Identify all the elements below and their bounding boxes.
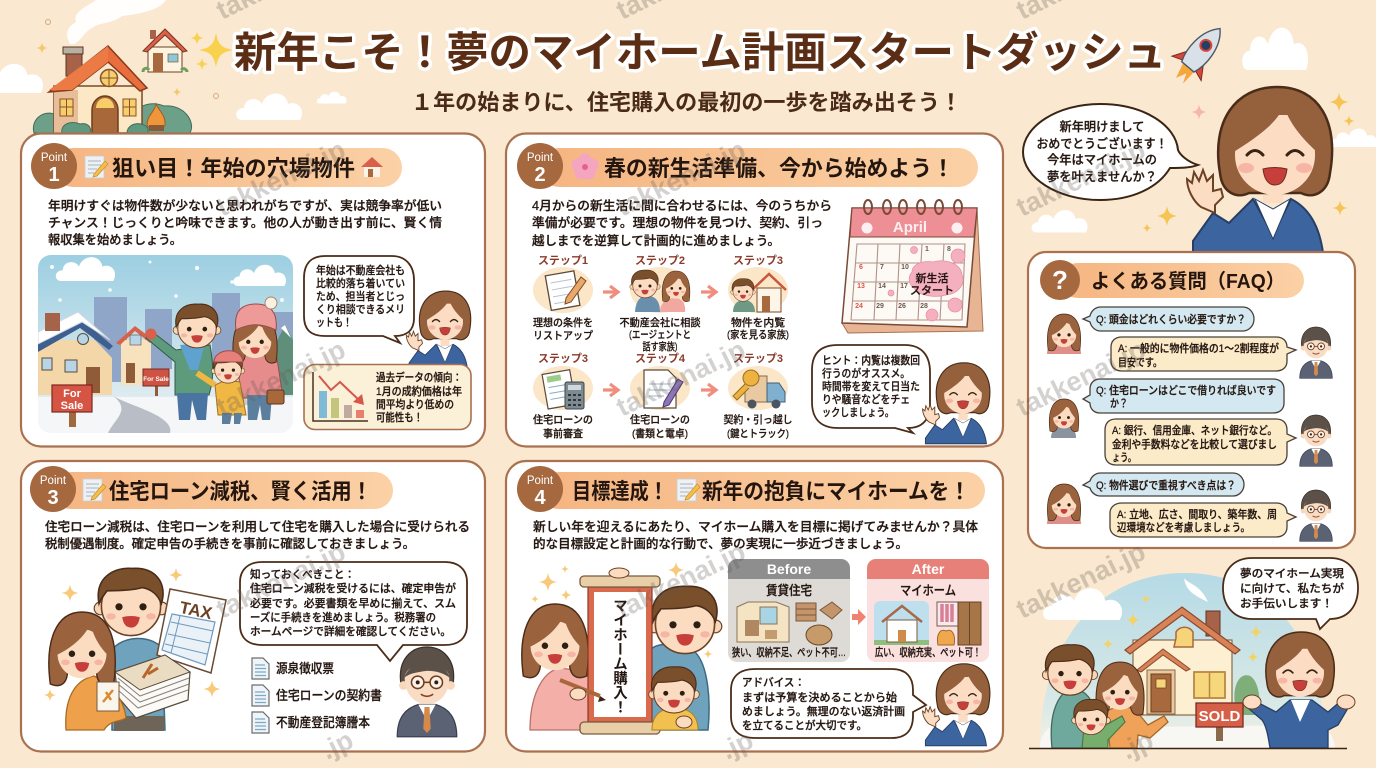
step 5: (書類と電卓) — [632, 427, 688, 440]
comparison: after — [867, 559, 989, 662]
step 4 — [533, 352, 593, 440]
For Sale sign — [69, 412, 76, 427]
callout: price trend: 過去データの傾向： — [376, 370, 462, 384]
text: point 3 body: 税制優遇制度。確定申告の手続きを事前に確認しておきましょう。 — [45, 536, 415, 551]
step 2: ステップ2 — [635, 254, 685, 267]
arrow — [603, 286, 618, 298]
illustration: couple with tax papers — [44, 568, 226, 731]
step 2: 話す家族) — [642, 340, 678, 353]
speech bubble: hint: 時間帯を変えて日当た — [822, 379, 920, 393]
panel frame — [506, 134, 1003, 446]
step 4: 事前審査 — [543, 427, 583, 440]
speech bubble: point 1: ため、担当者とじっ — [316, 289, 405, 303]
answer 2: ょう。 — [1112, 451, 1136, 464]
text: point 3 body — [45, 519, 470, 551]
speech bubble: hint: りや騒音などをチェ — [822, 392, 910, 406]
comparison: before: Before — [767, 561, 811, 577]
arrow — [701, 286, 716, 298]
illustration: April calendar: 14 — [878, 283, 886, 290]
step 5 — [630, 352, 690, 440]
answer 1: A: 一般的に物件価格の1～2割程度が — [1118, 341, 1279, 355]
heading: point 3 — [30, 466, 393, 512]
list: required documents: 不動産登記簿謄本 — [276, 715, 370, 730]
panel: FAQ — [1028, 252, 1355, 548]
watermark: takkenai.jp — [611, 334, 750, 422]
child — [215, 380, 246, 415]
speech bubble: point 1 — [304, 256, 414, 343]
watermark: takkenai.jp — [211, 134, 350, 222]
heading: FAQ: ? — [1052, 265, 1068, 295]
text: point 1 body — [48, 198, 442, 247]
illustration: house with smoke — [33, 0, 219, 133]
heading: FAQ — [1040, 260, 1304, 300]
watermark — [211, 0, 1158, 765]
character: advisor — [923, 664, 990, 746]
answer 2: 金利や手数料などを比較して選びまし — [1112, 437, 1277, 451]
heading: point 3: 3 — [47, 487, 59, 509]
arrow — [603, 384, 618, 396]
step 5: 住宅ローンの — [630, 413, 690, 426]
speech bubble: hint: ヒント：内覧は複数回 — [822, 353, 920, 367]
illustration: April calendar: 26 — [898, 303, 906, 310]
icon: sparkles — [190, 32, 233, 70]
step 1: 理想の条件を — [533, 316, 593, 329]
SOLD sign: SOLD — [1199, 708, 1240, 725]
heading: FAQ: よくある質問（FAQ） — [1091, 270, 1285, 293]
illustration: April calendar: 新生活 — [916, 271, 948, 285]
arrow: before to after — [852, 609, 866, 625]
heading: point 4: 新年の抱負にマイホームを！ — [702, 479, 970, 504]
list: required documents: 住宅ローンの契約書 — [276, 688, 382, 703]
speech bubble: hint: ックしましょう。 — [822, 406, 894, 419]
heading: point 4: 4 — [534, 487, 546, 509]
step 6: ステップ3 — [733, 352, 783, 365]
step 6: (鍵とトラック) — [727, 427, 789, 440]
heading: point 1: 1 — [48, 164, 60, 186]
woman in hat — [238, 355, 282, 398]
speech bubble: greeting: 新年明けまして — [1060, 119, 1144, 134]
speech bubble: need to know — [240, 562, 467, 661]
speech bubble: closing: に向けて、私たちが — [1240, 581, 1344, 595]
heading: point 3: Point — [40, 475, 67, 487]
step 6: 契約・引っ越し — [724, 413, 792, 426]
illustration: April calendar: 8 — [947, 246, 951, 253]
SOLD sign — [1196, 703, 1243, 741]
comparison: before: 狭い、収納不足、ペット不可… — [732, 645, 846, 659]
illustration: family with resolution scroll: マイホーム購入！ — [611, 598, 627, 714]
text: point 2 body — [532, 198, 832, 248]
avatar: advisor 1 — [1300, 327, 1332, 378]
watermark: .jp — [716, 725, 758, 765]
illustration: family with resolution scroll — [522, 562, 722, 734]
illustration: April calendar: 10 — [901, 264, 909, 271]
comparison: after: マイホーム — [900, 583, 956, 598]
panel frame — [506, 461, 1003, 752]
step 1: リストアップ — [533, 330, 593, 342]
illustration: April calendar: 17 — [900, 283, 908, 290]
character: advisor — [406, 291, 471, 369]
title: 新年こそ！夢のマイホーム計画スタートダッシュ — [234, 29, 1166, 76]
avatar: woman asking 1 — [1047, 314, 1081, 354]
man pointing — [146, 330, 213, 395]
text: point 4 body — [533, 519, 978, 551]
step 1 — [533, 254, 593, 342]
speech bubble: need to know: ーズに手続きを進めましょう。税務署の — [250, 610, 436, 624]
text: point 2 body: 4月からの新生活に間に合わせるには、今のうちから — [532, 198, 832, 213]
heading: point 4: Point — [527, 475, 554, 487]
text: point 1 body: 報収集を始めましょう。 — [48, 232, 182, 247]
watermark: takkenai.jp — [1011, 334, 1150, 422]
speech bubble: point 1: くり相談できるメリ — [316, 302, 405, 316]
heading: point 4: 目標達成！ — [572, 479, 668, 504]
character: tax advisor — [397, 647, 457, 737]
illustration: April calendar: 1 — [925, 246, 929, 253]
heading: point 1: Point — [41, 152, 68, 164]
family — [1042, 645, 1168, 748]
question 1: Q: 頭金はどれくらい必要ですか？ — [1096, 312, 1246, 326]
step 1: ステップ1 — [538, 254, 588, 267]
watermark: takkenai.jp — [1011, 134, 1150, 222]
steps flow — [533, 254, 792, 440]
speech bubble: point 1: ットも！ — [316, 316, 352, 329]
panel: point 2 — [506, 134, 1003, 446]
illustration: April calendar: April — [893, 219, 927, 236]
speech bubble: greeting: 夢を叶えませんか？ — [1047, 170, 1157, 184]
answer 2: A: 銀行、信用金庫、ネット銀行など。 — [1112, 423, 1277, 437]
step 2: 不動産会社に相談 — [620, 316, 701, 329]
illustration: family at new home with advisor — [1029, 573, 1355, 748]
speech bubble: advice: めましょう。無理のない返済計画 — [742, 704, 905, 718]
avatar: advisor 2 — [1300, 415, 1332, 466]
subtitle: １年の始まりに、住宅購入の最初の一歩を踏み出そう！ — [411, 90, 962, 115]
speech bubble: need to know: 住宅ローン減税を受けるには、確定申告が — [250, 581, 456, 595]
illustration: April calendar: スタート — [910, 284, 954, 297]
heading: point 4 — [517, 466, 985, 512]
heading: point 2: 春の新生活準備、今から始めよう！ — [604, 156, 954, 181]
panel: point 1 — [21, 134, 485, 446]
panel frame — [1028, 252, 1355, 548]
step 3 — [727, 254, 789, 341]
watermark: takkenai.jp — [1011, 536, 1150, 624]
text: point 1 body: 年明けすぐは物件数が少ないと思われがちですが、実は競争率が低い — [48, 198, 442, 213]
step 5: ステップ4 — [635, 352, 686, 365]
speech bubble: greeting: 今年はマイホームの — [1047, 152, 1157, 167]
step 6 — [724, 352, 792, 440]
speech bubble: need to know: 知っておくべきこと： — [250, 567, 355, 581]
step 4: 住宅ローンの — [533, 413, 593, 426]
answer 2 — [1105, 419, 1296, 465]
speech bubble: point 1: 年始は不動産会社も — [316, 263, 405, 277]
panel: greeting with advisor — [1023, 87, 1354, 253]
question 2 — [1083, 379, 1284, 413]
step 4: ステップ3 — [538, 352, 588, 365]
heading: point 3: 住宅ローン減税、賢く活用！ — [109, 479, 372, 504]
callout: price trend: 1月の成約価格は年 — [376, 384, 462, 398]
speech bubble: greeting — [1023, 104, 1198, 200]
background clouds — [0, 28, 1376, 232]
text: point 4 body: 新しい年を迎えるにあたり、マイホーム購入を目標に掲げてみませんか？具体 — [533, 519, 978, 534]
question 2: Q: 住宅ローンはどこで借りれば良いです — [1096, 383, 1276, 397]
watermark: .jp — [1116, 725, 1158, 765]
speech bubble: need to know: ホームページで詳細を確認してください。 — [250, 624, 451, 638]
comparison: after: After — [912, 561, 945, 577]
list: required documents: 源泉徴収票 — [276, 661, 334, 676]
watermark: .jp — [316, 725, 358, 765]
arrow — [701, 384, 716, 396]
advisor — [1243, 632, 1355, 748]
speech bubble: advice: まずは予算を決めることから始 — [742, 690, 897, 704]
comparison: before — [728, 559, 850, 662]
text: point 4 body: 的な目標設定と計画的な行動で、夢の実現に一歩近づきましょう。 — [533, 536, 908, 551]
callout: price trend — [304, 364, 471, 430]
heading: point 1: 狙い目！年始の穴場物件 — [112, 156, 355, 181]
icon: rocket — [1163, 16, 1235, 91]
illustration: April calendar: 24 — [855, 303, 863, 310]
panel frame — [21, 461, 485, 752]
speech bubble: advice — [731, 669, 926, 738]
illustration: April calendar: 7 — [880, 264, 884, 271]
heading: point 2: Point — [527, 152, 554, 164]
text: point 2 body: 準備が必要です。理想の物件を見つけ、契約、引っ — [532, 215, 823, 230]
step 2 — [620, 254, 701, 353]
comparison: after: 広い、収納充実、ペット可！ — [875, 645, 981, 659]
heading: point 2 — [517, 143, 978, 189]
answer 3: 辺環境などを考慮しましょう。 — [1117, 520, 1250, 534]
panel frame — [21, 134, 485, 446]
speech bubble: advice: を立てることが大切です。 — [742, 718, 867, 732]
watermark: takkenai.jp — [611, 536, 750, 624]
avatar: advisor 3 — [1300, 490, 1332, 541]
speech bubble: closing — [1223, 558, 1358, 629]
character: advisor — [923, 363, 990, 444]
illustration: family in snowy neighbourhood: Sale — [61, 400, 83, 412]
illustration: April calendar: 28 — [920, 303, 928, 310]
text: point 1 body: チャンス！じっくりと吟味できます。他の人が動き出す前に、賢く情 — [48, 215, 442, 230]
panel: point 3 — [21, 461, 485, 752]
text: point 3 body: 住宅ローン減税は、住宅ローンを利用して住宅を購入した場合に受けられる — [45, 519, 470, 534]
step 3: (家を見る家族) — [727, 328, 789, 341]
comparison: before: 賃貸住宅 — [766, 583, 812, 598]
speech bubble: hint: 行うのがオススメ。 — [822, 366, 910, 380]
step 3: ステップ3 — [733, 254, 783, 267]
icon: small house — [143, 29, 187, 72]
panel: point 4 — [506, 461, 1003, 752]
speech bubble: closing: お手伝いします！ — [1240, 596, 1333, 610]
text: point 2 body: 越しまでを逆算して計画的に進めましょう。 — [532, 233, 780, 248]
answer 1 — [1111, 337, 1296, 371]
speech bubble: closing: 夢のマイホーム実現 — [1240, 566, 1344, 580]
watermark: takkenai.jp — [211, 334, 350, 422]
step 2: (エージェントと — [629, 329, 691, 341]
answer 1: 目安です。 — [1118, 355, 1162, 369]
character: advisor waving — [1187, 87, 1332, 253]
answer 3 — [1110, 503, 1296, 537]
list: required documents — [252, 658, 382, 733]
callout: price trend: 間平均より低めの — [376, 397, 454, 411]
speech bubble: advice: アドバイス： — [742, 676, 805, 689]
question 2: か？ — [1110, 397, 1128, 410]
step 3: 物件を内覧 — [731, 316, 786, 329]
question 3 — [1083, 473, 1244, 496]
illustration: family in snowy neighbourhood: For — [63, 388, 82, 400]
question 1 — [1083, 307, 1254, 331]
illustration: family in snowy neighbourhood — [38, 255, 293, 433]
speech bubble: hint — [812, 345, 930, 433]
heading: point 1 — [31, 143, 402, 189]
illustration: couple with tax papers: TAX — [178, 598, 215, 623]
avatar: woman asking 3 — [1047, 484, 1081, 524]
speech bubble: greeting: おめでとうございます！ — [1036, 136, 1168, 151]
ground line — [1029, 748, 1347, 750]
speech bubble: point 1: 比較的落ち着いてい — [316, 276, 405, 290]
heading: point 2: 2 — [534, 164, 546, 186]
watermark: takkenai.jp — [211, 536, 350, 624]
answer 3: A: 立地、広さ、間取り、築年数、周 — [1117, 507, 1277, 521]
question 3: Q: 物件選びで重視すべき点は？ — [1096, 478, 1236, 492]
illustration: April calendar: 13 — [857, 283, 865, 290]
illustration: April calendar — [842, 200, 983, 333]
avatar: woman asking 2 — [1049, 399, 1079, 438]
illustration: family in snowy neighbourhood: For Sale — [143, 376, 169, 383]
illustration: April calendar: 6 — [859, 264, 863, 271]
watermark: takkenai.jp — [611, 134, 750, 222]
illustration: April calendar: 29 — [876, 303, 884, 310]
callout: price trend: 可能性も！ — [376, 410, 423, 424]
speech bubble: need to know: 必要です。必要書類を早めに揃えて、スム — [250, 596, 456, 610]
sparkles — [1142, 92, 1354, 232]
